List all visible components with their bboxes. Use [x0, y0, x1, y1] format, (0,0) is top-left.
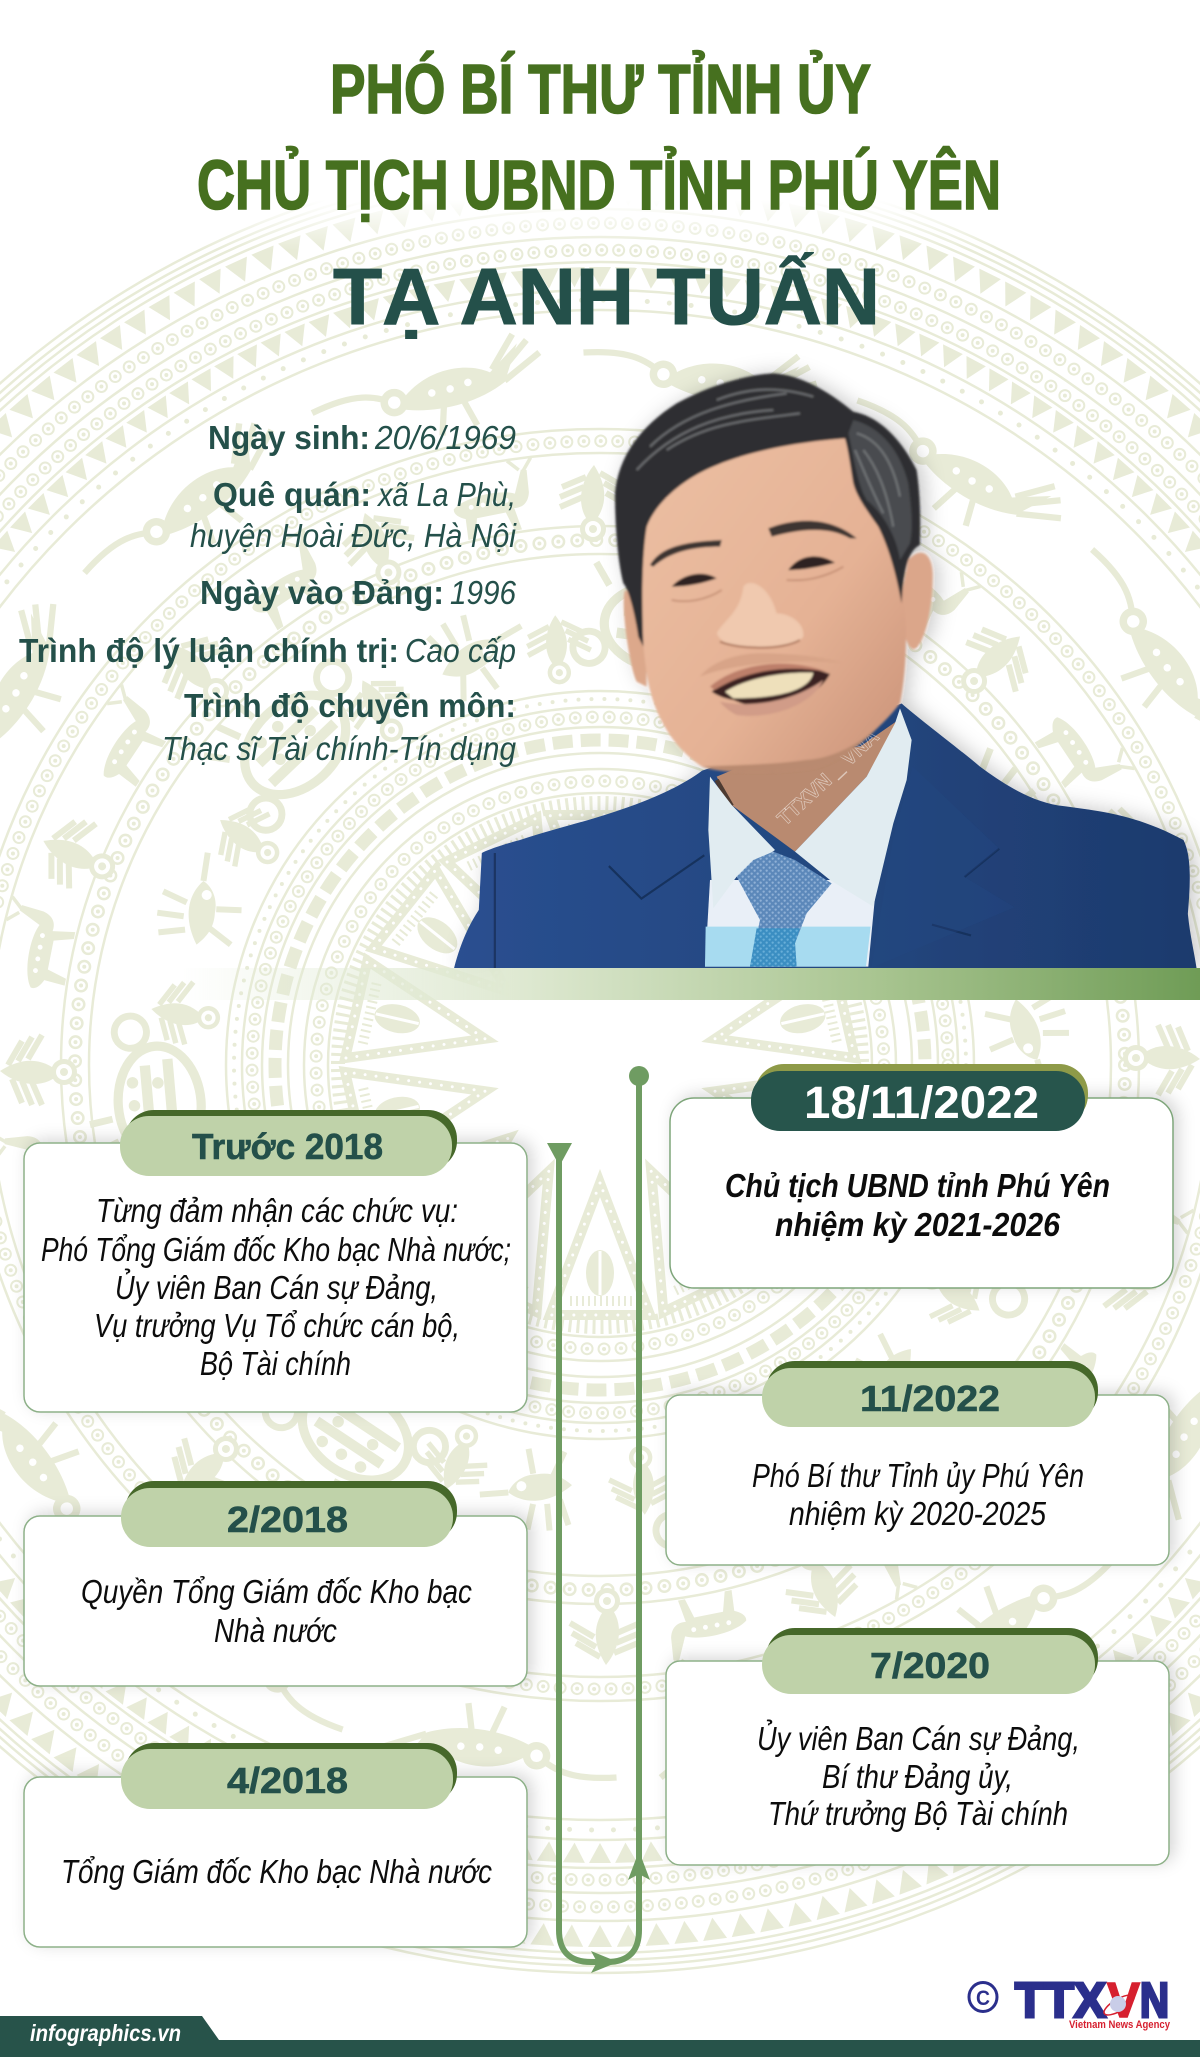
panel: 4/2018	[24, 1743, 527, 1947]
panel: 11/2022	[666, 1361, 1169, 1565]
footer bar: infographics.vn	[30, 2020, 181, 2046]
panel: 7/2020	[666, 1628, 1169, 1865]
eyebrows	[650, 521, 857, 567]
TTXVN logo: V	[1107, 1974, 1140, 2028]
panel: Trước 2018	[24, 1110, 527, 1412]
personal information text block: huyện Hoài Đức, Hà Nội	[190, 517, 518, 554]
personal information text block: Ngày vào Đảng:	[200, 574, 444, 611]
panel: Trước 2018: Vụ trưởng Vụ Tổ chức cán bộ,	[94, 1307, 460, 1344]
personal information text block: Quê quán:	[213, 476, 371, 513]
panel: 4/2018: Tổng Giám đốc Kho bạc Nhà nước	[61, 1853, 492, 1890]
panel: 11/2022: Phó Bí thư Tỉnh ủy Phú Yên	[752, 1457, 1084, 1494]
suit	[454, 703, 1197, 968]
portrait photo	[454, 373, 1197, 968]
TTXVN logo: Vietnam News Agency	[1069, 2019, 1171, 2031]
mouth	[712, 666, 830, 707]
hair	[615, 373, 920, 647]
personal information text block: Cao cấp	[405, 632, 516, 669]
personal information text block: 20/6/1969	[374, 419, 516, 456]
panel: 7/2020: 7/2020	[870, 1645, 990, 1686]
panel: 4/2018: 4/2018	[227, 1760, 348, 1801]
TTXVN logo: C	[976, 1987, 990, 2010]
panel: 11/2022: 11/2022	[860, 1378, 1000, 1419]
panel: 18/11/2022	[670, 1064, 1173, 1288]
panel: 11/2022: nhiệm kỳ 2020-2025	[789, 1495, 1047, 1532]
collar, neck and tie	[705, 708, 912, 967]
grey hair strands	[848, 420, 912, 560]
personal information text block: Trình độ chuyên môn:	[184, 687, 516, 724]
nasolabial shadow	[700, 653, 843, 677]
panel: Trước 2018: Ủy viên Ban Cán sự Đảng,	[115, 1268, 438, 1306]
personal information text block: Trình độ lý luận chính trị:	[19, 632, 399, 669]
panel: Trước 2018: Trước 2018	[192, 1126, 383, 1167]
eyes	[672, 556, 835, 587]
footer bar	[0, 2016, 1200, 2057]
collar, neck and tie: TTXVN _ VNA	[773, 726, 883, 830]
panel: 7/2020: Bí thư Đảng ủy,	[822, 1758, 1013, 1795]
personal information text block: xã La Phù,	[376, 476, 516, 513]
panel: Trước 2018: Bộ Tài chính	[200, 1345, 351, 1382]
TTXVN logo	[969, 1974, 1171, 2031]
personal information text block: Ngày sinh:	[208, 419, 370, 456]
panel: 7/2020: Thứ trưởng Bộ Tài chính	[768, 1795, 1068, 1832]
ears	[624, 590, 647, 687]
panel: 2/2018: Nhà nước	[214, 1612, 337, 1649]
panel: 18/11/2022: nhiệm kỳ 2021-2026	[775, 1206, 1061, 1243]
timeline with arrows	[547, 1066, 650, 1973]
title: PHÓ BÍ THƯ TỈNH ỦY	[330, 49, 871, 128]
panel: 18/11/2022: Chủ tịch UBND tỉnh Phú Yên	[725, 1167, 1110, 1204]
panel: 2/2018: 2/2018	[227, 1499, 348, 1540]
head	[615, 373, 933, 772]
nose	[717, 583, 803, 648]
chin shadow	[702, 710, 893, 772]
TTXVN logo: N	[1140, 1974, 1169, 2028]
personal information text block: Thạc sĩ Tài chính-Tín dụng	[162, 730, 517, 767]
green gradient band	[180, 968, 1200, 1000]
panel: 7/2020: Ủy viên Ban Cán sự Đảng,	[757, 1719, 1080, 1757]
personal information text block: 1996	[450, 574, 517, 611]
personal information text block	[19, 419, 518, 767]
panel: Trước 2018: Từng đảm nhận các chức vụ:	[96, 1192, 458, 1229]
title: TẠ ANH TUẤN	[333, 252, 880, 341]
panel: 18/11/2022: 18/11/2022	[804, 1077, 1039, 1128]
TTXVN logo: TTX	[1015, 1974, 1106, 2028]
panel: Trước 2018: Phó Tổng Giám đốc Kho bạc Nhà nước;	[41, 1231, 511, 1268]
face	[637, 420, 906, 772]
panel: 2/2018	[24, 1481, 527, 1686]
panel: 2/2018: Quyền Tổng Giám đốc Kho bạc	[81, 1573, 472, 1610]
title	[197, 49, 1001, 341]
